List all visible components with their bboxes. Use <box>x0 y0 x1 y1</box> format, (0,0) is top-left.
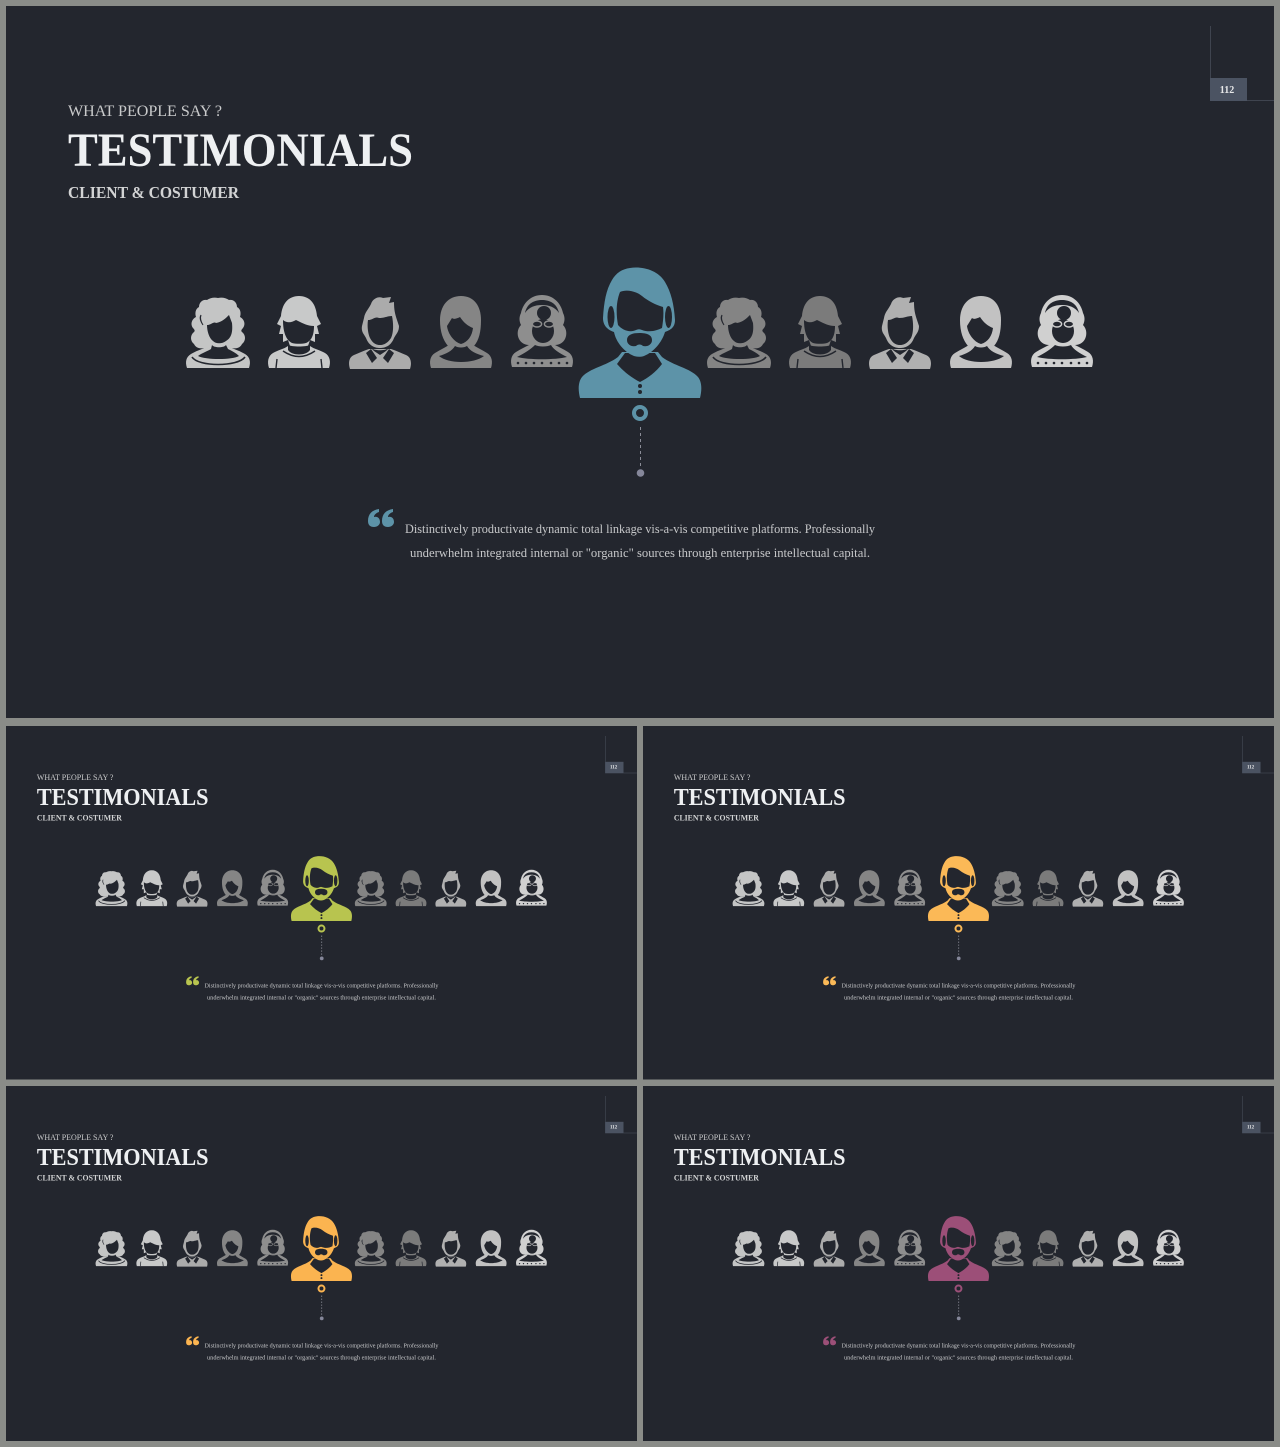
page number tab <box>1242 1096 1274 1133</box>
icon: shaggy hair person <box>396 1230 426 1266</box>
avatar row <box>96 856 547 921</box>
testimonial text <box>205 1342 439 1361</box>
testimonial text: underwhelm integrated internal or "organic" sources through enterprise intellectual capital. <box>207 1354 436 1361</box>
page number tab: 112 <box>1220 85 1234 96</box>
icon: quote mark <box>823 1336 836 1345</box>
page number tab: 112 <box>1247 765 1255 770</box>
testimonial text: underwhelm integrated internal or "organic" sources through enterprise intellectual capital. <box>207 994 436 1001</box>
connector: ring and dashed line <box>955 926 961 960</box>
icon: woman with glasses <box>1153 1230 1184 1266</box>
icon: bob hair woman <box>854 1230 885 1266</box>
icon: woman with glasses <box>894 870 925 906</box>
icon: bearded man highlighted <box>291 856 352 921</box>
testimonial text: Distinctively productivate dynamic total linkage vis-a-vis competitive platforms. Professionally <box>405 521 875 536</box>
icon: bearded man highlighted <box>291 1216 352 1281</box>
icon: bearded man highlighted <box>579 268 701 398</box>
heading: title: TESTIMONIALS <box>37 1145 209 1171</box>
testimonial text: underwhelm integrated internal or "organic" sources through enterprise intellectual capital. <box>844 1354 1073 1361</box>
icon: shaggy hair person <box>773 870 804 906</box>
icon: man with collar <box>435 871 466 907</box>
heading: subtitle: CLIENT & COSTUMER <box>674 1174 759 1183</box>
icon: quote mark <box>186 976 199 985</box>
icon: woman with glasses <box>516 870 547 906</box>
icon: man with collar <box>814 871 845 907</box>
icon: shaggy hair person <box>789 296 851 368</box>
icon: man with collar <box>435 1231 466 1267</box>
heading: eyebrow: WHAT PEOPLE SAY ? <box>37 773 114 782</box>
heading: eyebrow: WHAT PEOPLE SAY ? <box>674 773 751 782</box>
icon: bob hair woman <box>1113 870 1144 906</box>
heading: title: TESTIMONIALS <box>674 785 846 811</box>
testimonial text <box>205 982 439 1001</box>
panel: small slide, amber <box>643 726 1274 1080</box>
heading: eyebrow: WHAT PEOPLE SAY ? <box>68 103 222 120</box>
panel: small slide, green <box>6 726 637 1080</box>
heading: eyebrow: WHAT PEOPLE SAY ? <box>37 1133 114 1142</box>
icon: shaggy hair person <box>136 1230 167 1266</box>
connector: ring and dashed line <box>955 1286 961 1320</box>
icon: bob hair woman <box>430 296 492 368</box>
icon: woman with glasses <box>511 295 573 367</box>
heading: subtitle: CLIENT & COSTUMER <box>37 1174 122 1183</box>
icon: man with collar <box>177 871 208 907</box>
testimonial text: underwhelm integrated internal or "organic" sources through enterprise intellectual capital. <box>844 994 1073 1001</box>
icon: curly hair woman <box>96 871 127 906</box>
icon: curly hair woman <box>992 1231 1024 1266</box>
connector: ring and dashed line <box>634 407 646 477</box>
panel: small slide, plum <box>643 1086 1274 1441</box>
page number tab <box>1242 736 1274 773</box>
icon: woman with glasses <box>894 1230 925 1266</box>
page number tab: 112 <box>610 1125 618 1130</box>
page number tab <box>605 736 637 773</box>
connector: ring and dashed line <box>318 1286 324 1320</box>
page number tab <box>1210 26 1274 101</box>
icon: quote mark <box>368 509 394 527</box>
panel: small slide, orange <box>6 1086 637 1441</box>
testimonial text: Distinctively productivate dynamic total linkage vis-a-vis competitive platforms. Professionally <box>842 1342 1076 1349</box>
panel: main slide, teal <box>6 6 1274 718</box>
page number tab: 112 <box>610 765 618 770</box>
icon: woman with glasses <box>257 870 288 906</box>
icon: man with collar <box>349 297 411 369</box>
icon: shaggy hair person <box>268 296 330 368</box>
icon: bob hair woman <box>950 296 1012 368</box>
heading: subtitle: CLIENT & COSTUMER <box>37 814 122 823</box>
heading: title: TESTIMONIALS <box>674 1145 846 1171</box>
icon: bob hair woman <box>476 1230 507 1266</box>
icon: bob hair woman <box>476 870 507 906</box>
testimonial text: underwhelm integrated internal or "organic" sources through enterprise intellectual capital. <box>410 545 870 560</box>
icon: shaggy hair person <box>136 870 167 906</box>
icon: bob hair woman <box>217 1230 248 1266</box>
icon: shaggy hair person <box>773 1230 804 1266</box>
icon: quote mark <box>186 1336 199 1345</box>
connector: ring and dashed line <box>318 926 324 960</box>
heading: title: TESTIMONIALS <box>68 124 413 177</box>
icon: curly hair woman <box>186 298 250 368</box>
avatar row <box>733 1216 1184 1281</box>
heading: subtitle: CLIENT & COSTUMER <box>674 814 759 823</box>
icon: man with collar <box>869 297 931 369</box>
icon: curly hair woman <box>96 1231 127 1266</box>
icon: man with collar <box>814 1231 845 1267</box>
icon: bob hair woman <box>1113 1230 1144 1266</box>
avatar row <box>96 1216 547 1281</box>
icon: woman with glasses <box>1153 870 1184 906</box>
icon: man with collar <box>1072 871 1103 907</box>
heading: title: TESTIMONIALS <box>37 785 209 811</box>
icon: bearded man highlighted <box>928 856 989 921</box>
icon: curly hair woman <box>707 298 771 368</box>
icon: curly hair woman <box>733 871 764 906</box>
testimonial text: Distinctively productivate dynamic total linkage vis-a-vis competitive platforms. Professionally <box>205 1342 439 1349</box>
icon: curly hair woman <box>355 871 387 906</box>
heading: eyebrow: WHAT PEOPLE SAY ? <box>674 1133 751 1142</box>
avatar row <box>186 268 1093 398</box>
page number tab: 112 <box>1247 1125 1255 1130</box>
icon: shaggy hair person <box>1033 1230 1063 1266</box>
icon: woman with glasses <box>257 1230 288 1266</box>
testimonial text <box>842 1342 1076 1361</box>
icon: woman with glasses <box>1031 295 1093 367</box>
testimonial text <box>405 521 875 560</box>
icon: curly hair woman <box>992 871 1024 906</box>
icon: quote mark <box>823 976 836 985</box>
testimonial text: Distinctively productivate dynamic total linkage vis-a-vis competitive platforms. Professionally <box>842 982 1076 989</box>
icon: curly hair woman <box>733 1231 764 1266</box>
avatar row <box>733 856 1184 921</box>
page number tab <box>605 1096 637 1133</box>
icon: bearded man highlighted <box>928 1216 989 1281</box>
icon: woman with glasses <box>516 1230 547 1266</box>
icon: bob hair woman <box>854 870 885 906</box>
icon: bob hair woman <box>217 870 248 906</box>
icon: shaggy hair person <box>1033 870 1063 906</box>
icon: man with collar <box>1072 1231 1103 1267</box>
icon: man with collar <box>177 1231 208 1267</box>
heading: subtitle: CLIENT & COSTUMER <box>68 183 240 202</box>
testimonial text: Distinctively productivate dynamic total linkage vis-a-vis competitive platforms. Professionally <box>205 982 439 989</box>
icon: shaggy hair person <box>396 870 426 906</box>
icon: curly hair woman <box>355 1231 387 1266</box>
testimonial text <box>842 982 1076 1001</box>
